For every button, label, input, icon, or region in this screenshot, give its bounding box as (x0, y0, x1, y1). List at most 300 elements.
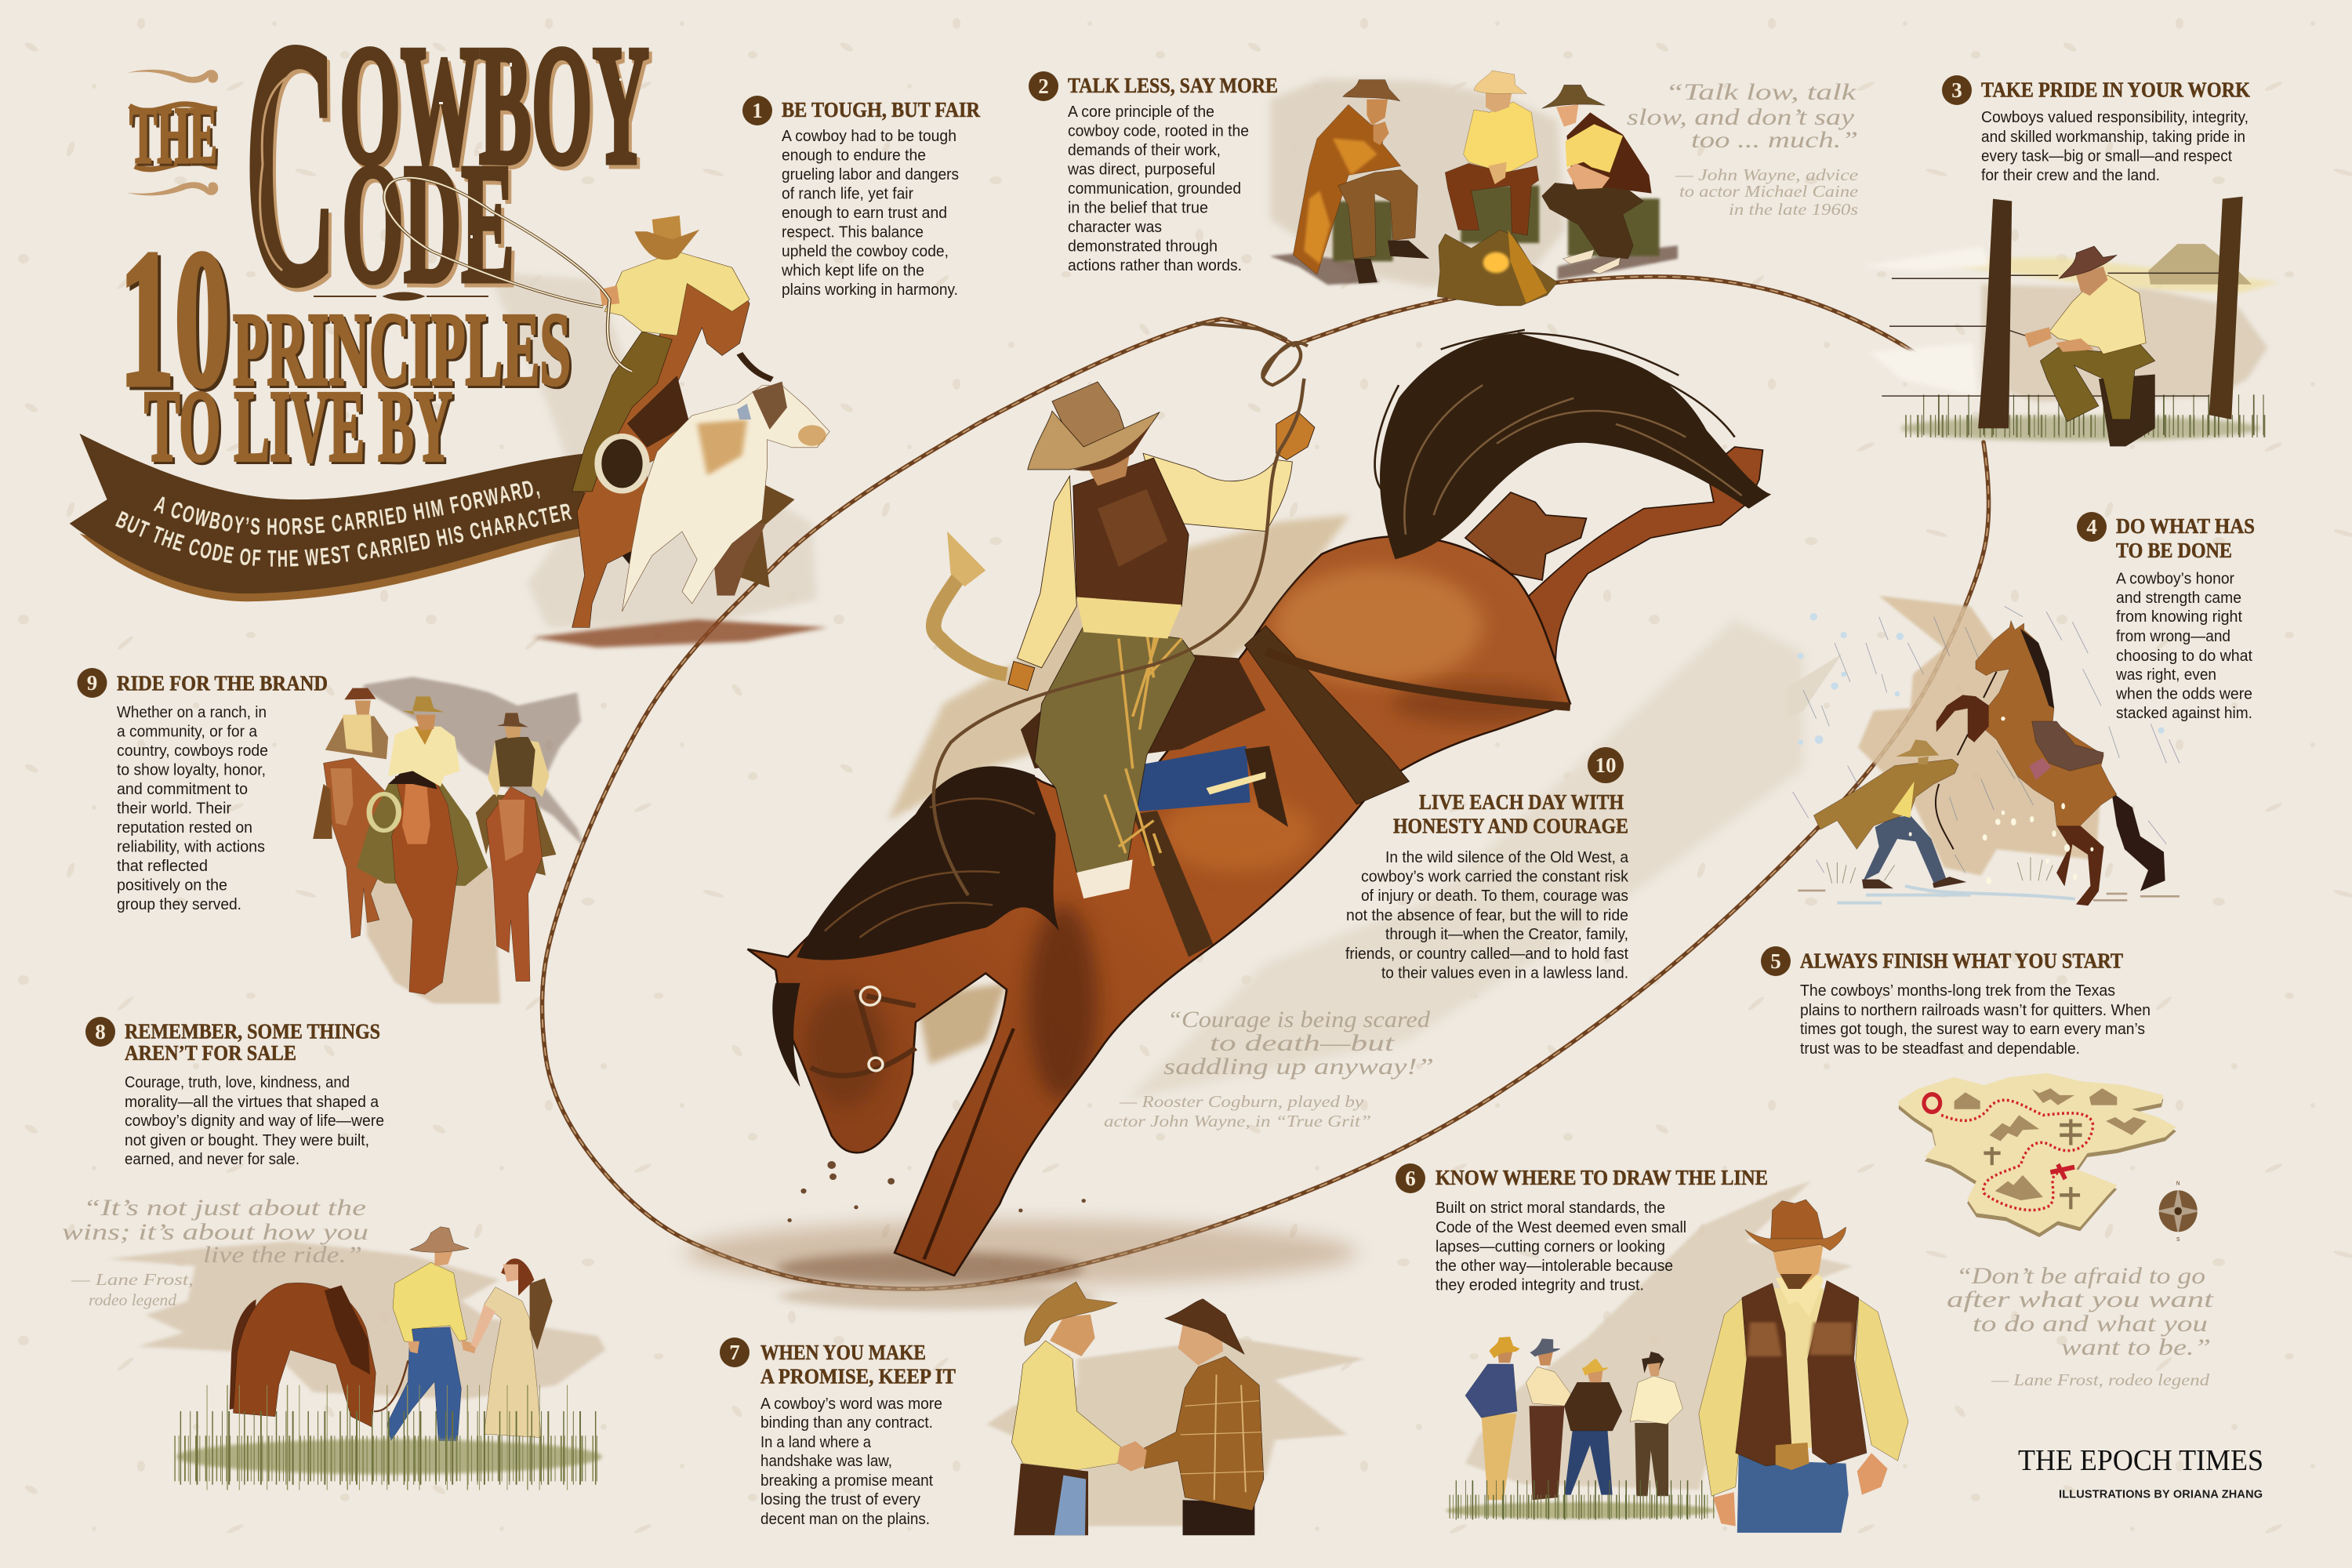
rain (1793, 606, 2180, 873)
man one (1465, 1337, 1519, 1500)
compass: N (2176, 1181, 2180, 1187)
title: to live by (144, 370, 455, 485)
body 1: which kept life on the (781, 262, 924, 279)
quote: Lane Frost dream (1947, 1263, 2214, 1389)
body 3: and skilled workmanship, taking pride in (1981, 129, 2245, 146)
heading 7: A PROMISE, KEEP IT (760, 1364, 956, 1388)
man 1 boots (1354, 241, 1429, 284)
hat (1771, 1200, 1824, 1240)
badge 4 (2077, 512, 2107, 542)
quote: Rooster Cogburn: saddling up anyway!” (1163, 1054, 1434, 1080)
body 9: reputation rested on (117, 819, 252, 837)
body 7 (760, 1396, 942, 1528)
badge 10 (1588, 747, 1624, 783)
quote: John Wayne (1627, 79, 1858, 219)
body 9: that reflected (117, 858, 208, 875)
grass (174, 1438, 602, 1474)
badge 6 (1396, 1163, 1425, 1193)
quote: Lane Frost dream: after what you want (1947, 1287, 2214, 1312)
kicking hind leg (1518, 447, 1762, 677)
whip tassel (947, 532, 985, 586)
principle 9 (77, 668, 328, 913)
title: principles: PRINCIPLES (233, 291, 571, 407)
illustration: campfire conversation (1270, 71, 1678, 306)
fence post left (1978, 199, 2012, 428)
grass (1446, 1500, 1715, 1519)
illustration: family and grazing horse (108, 1227, 606, 1474)
barn (2148, 244, 2252, 285)
horse (1936, 621, 2117, 906)
body 7: In a land where a (760, 1434, 872, 1451)
man shirt (2049, 275, 2146, 354)
badge 6: 6 (1405, 1167, 1416, 1190)
ear tag (737, 404, 751, 419)
quote: Lane Frost ride: rodeo legend (89, 1290, 176, 1309)
man head (434, 1248, 454, 1266)
heading 7 (760, 1341, 956, 1388)
body 5: plains to northern railroads wasn’t for quitters. When (1800, 1002, 2151, 1019)
body 10: to their values even in a lawless land. (1381, 964, 1628, 982)
shirt waist (1076, 597, 1181, 638)
face left (1050, 1315, 1095, 1356)
boots (1862, 877, 1966, 888)
horse shading (804, 567, 1559, 1259)
baby (530, 1278, 553, 1350)
body 10: friends, or country called—and to hold fast (1345, 946, 1628, 963)
body 1: respect. This balance (782, 224, 924, 241)
body 3: for their crew and the land. (1981, 167, 2160, 184)
body 2: A core principle of the (1068, 103, 1214, 121)
body 4: was right, even (2115, 666, 2216, 684)
face (2076, 267, 2107, 296)
grass (1900, 415, 2265, 441)
lead rope (1936, 672, 1997, 849)
heading 10: LIVE EACH DAY WITH (1419, 790, 1624, 814)
body 10: through it—when the Creator, family, (1385, 926, 1628, 943)
man two (1526, 1338, 1576, 1500)
title: cowboy code (245, 0, 652, 362)
badge 1 (742, 96, 772, 125)
heading 7: WHEN YOU MAKE (760, 1341, 926, 1364)
body 2: communication, grounded (1068, 180, 1241, 198)
body 9 (117, 704, 268, 913)
body 1: enough to earn trust and (782, 205, 947, 222)
title: 10 (119, 210, 233, 430)
compass: S (2176, 1237, 2180, 1243)
body 5 (1800, 982, 2151, 1058)
left rider (325, 688, 388, 759)
plaid lines (1181, 1374, 1264, 1500)
body 9: reliability, with actions (117, 839, 265, 856)
lead rope (374, 1353, 423, 1411)
map land (1899, 1073, 2176, 1233)
pants right (1183, 1500, 1254, 1535)
wash (1858, 596, 2101, 876)
heading 4 (2116, 514, 2255, 562)
ground shadow (1270, 245, 1678, 285)
principle 7 (720, 1338, 956, 1528)
quote: Lane Frost ride: — Lane Frost, (71, 1270, 194, 1289)
principle 5 (1761, 946, 2151, 1058)
illustration: bucking bronco and rider (684, 323, 1803, 1286)
man 1 coat (1293, 104, 1401, 274)
man 2 shirt (1464, 102, 1538, 174)
saddle and girth (1021, 626, 1570, 957)
pale wash (1788, 653, 1842, 719)
body 5: The cowboys’ months-long trek from the Texas (1800, 982, 2115, 1000)
body 5: trust was to be steadfast and dependable. (1800, 1040, 2080, 1058)
man 3 head (1556, 104, 1578, 127)
ornament rule (314, 293, 488, 299)
man 1 head and hand (1367, 100, 1389, 145)
badge 7 (720, 1338, 750, 1367)
body 2: character was (1068, 219, 1162, 236)
quote: John Wayne: slow, and don’t say (1627, 104, 1855, 130)
banner: tagline ribbon (69, 434, 795, 602)
man hat (410, 1227, 469, 1252)
vest right (1808, 1280, 1867, 1465)
heading 2: TALK LESS, SAY MORE (1068, 74, 1278, 97)
quote: Rooster Cogburn: — Rooster Cogburn, played by (1119, 1092, 1364, 1111)
body 6: they eroded integrity and trust. (1436, 1276, 1644, 1294)
left horse (324, 758, 388, 938)
body 4: stacked against him. (2116, 705, 2252, 722)
quote: Rooster Cogburn: actor John Wayne, in “True Grit” (1104, 1112, 1371, 1131)
x marker (2050, 1164, 2074, 1179)
body 2: was direct, purposeful (1067, 162, 1215, 179)
horse mane (325, 1285, 370, 1374)
collar (1776, 1276, 1824, 1317)
dark lower legs (1936, 695, 2103, 906)
badge 2 (1029, 71, 1058, 101)
heading 8: REMEMBER, SOME THINGS (125, 1019, 380, 1043)
body 10 (1345, 849, 1629, 982)
trail wash (364, 868, 500, 1004)
hands (1713, 1453, 1888, 1526)
shirt patch (1892, 782, 1915, 818)
shirt front (1773, 1288, 1825, 1448)
wash behind calf roping scene (487, 271, 817, 627)
map land edge (1899, 1077, 2176, 1237)
body 9: a community, or for a (117, 723, 258, 740)
quote: Rooster Cogburn: “Courage is being scared (1167, 1007, 1431, 1033)
title: cowboy code: ODE (345, 133, 517, 322)
face (1772, 1244, 1824, 1288)
signposts (1984, 1119, 2082, 1209)
face (1080, 437, 1133, 486)
right rider legs (476, 794, 556, 876)
man jeans (1864, 815, 1947, 884)
illustration: mending the fence (1860, 197, 2279, 446)
body 8: not given or bought. They were built, (125, 1132, 369, 1149)
body 1: enough to endure the (782, 147, 926, 165)
horse shadow (627, 376, 690, 448)
body 9: country, cowboys rode (117, 742, 268, 760)
body 4 (2115, 571, 2252, 722)
body 9: Whether on a ranch, in (117, 704, 267, 721)
center forelock (388, 768, 437, 789)
center rider (388, 696, 460, 786)
illustration: lineup of cowboys (1446, 1181, 1908, 1533)
horse tail (230, 1299, 256, 1410)
badge 3 (1942, 75, 1972, 105)
beard (1780, 1274, 1813, 1289)
publisher credit: THE EPOCH TIMES (2018, 1444, 2263, 1477)
body 6: the other way—intolerable because (1436, 1258, 1673, 1275)
body 1: of ranch life, yet fair (782, 185, 913, 202)
body 4: A cowboy’s honor (2116, 571, 2234, 588)
shirt right (1145, 1356, 1264, 1511)
man 1 hat (1343, 80, 1400, 101)
body 1: upheld the cowboy code, (782, 243, 949, 260)
heading 10 (1393, 790, 1628, 837)
body 1: A cowboy had to be tough (782, 128, 956, 145)
body 8 (125, 1074, 384, 1168)
body 7: breaking a promise meant (760, 1472, 933, 1490)
illustration: three riders (313, 677, 584, 1004)
body 3: every task—big or small—and respect (1981, 147, 2232, 165)
body 9: group they served. (117, 896, 241, 913)
illustration: rearing horse in storm (1788, 596, 2180, 906)
face right (1178, 1325, 1223, 1366)
tail (607, 499, 642, 568)
title: the (127, 70, 220, 195)
body 1 (781, 128, 959, 299)
woman arm (470, 1305, 495, 1348)
body 9: and commitment to (117, 781, 248, 798)
title: 10: 10 (119, 210, 230, 427)
far calf legs (712, 524, 766, 596)
man 3 shoes (1563, 249, 1621, 274)
arm raised (1143, 453, 1292, 532)
principle 2 (1029, 71, 1278, 274)
lasso from hand (934, 323, 1308, 895)
quote: John Wayne: in the late 1960s (1729, 200, 1858, 219)
man 2 hands (1488, 162, 1507, 184)
hat (1028, 382, 1160, 470)
hands (2024, 327, 2094, 352)
trail (1941, 1100, 2093, 1210)
sleeves (1699, 1299, 1747, 1496)
title: 10: 10 (122, 213, 233, 430)
heading 3: TAKE PRIDE IN YOUR WORK (1981, 78, 2250, 102)
fire logs (1437, 230, 1558, 306)
badge 9: 9 (87, 671, 97, 695)
man shirt (393, 1262, 467, 1343)
heading 4: DO WHAT HAS (2116, 514, 2255, 538)
badge 9 (77, 668, 107, 698)
quote: Rooster Cogburn (1104, 1007, 1434, 1131)
ice spatters (1798, 613, 2165, 745)
coat highlights (1304, 139, 1377, 264)
quote: Lane Frost dream: “Don’t be afraid to go (1956, 1263, 2205, 1289)
body 6: Code of the West deemed even small (1436, 1219, 1686, 1236)
buckle (1776, 1443, 1809, 1470)
title: to live by: TO LIVE BY (144, 370, 452, 483)
principle 4 (2077, 512, 2255, 722)
woman dress (484, 1287, 541, 1438)
herd silhouette (364, 677, 584, 847)
horizon wash (1910, 257, 2279, 293)
hands (408, 1340, 477, 1353)
handshake (1117, 1441, 1147, 1472)
hat right (1165, 1299, 1244, 1354)
shirt (604, 252, 750, 336)
right horse face (499, 800, 524, 861)
hat and face (1896, 739, 1939, 764)
heading 4: TO BE DONE (2116, 539, 2232, 562)
body 10: of injury or death. To them, courage was (1361, 887, 1628, 905)
man 3 shirt (1566, 124, 1623, 172)
coat (1813, 759, 1958, 849)
man three (1564, 1359, 1622, 1495)
body 2: cowboy code, rooted in the (1068, 122, 1249, 140)
whip braid (934, 574, 1007, 674)
lariat loop (384, 178, 632, 372)
center horse blaze (402, 784, 430, 844)
illustration: rider roping a calf (384, 178, 829, 648)
far hind leg (1465, 492, 1586, 580)
snowfall (1909, 717, 2093, 884)
body 9: their world. Their (117, 800, 231, 817)
principle 6 (1396, 1163, 1768, 1294)
body 10: In the wild silence of the Old West, a (1385, 849, 1629, 866)
publisher credit (2018, 1444, 2263, 1501)
hat left (1025, 1282, 1117, 1346)
coiled rope (369, 794, 399, 830)
man 2 hat (1474, 71, 1526, 93)
body 7: losing the trust of every (760, 1491, 920, 1508)
badge 7: 7 (729, 1341, 740, 1364)
badge 1: 1 (752, 99, 763, 122)
badge 8 (85, 1017, 115, 1047)
man trousers (2040, 339, 2155, 422)
body 8: earned, and never for sale. (125, 1151, 299, 1168)
body 4: when the odds were (2115, 685, 2252, 702)
man 2 pants (1445, 163, 1539, 235)
body 7: A cowboy’s word was more (760, 1396, 942, 1413)
center horse (392, 776, 458, 994)
body 7: handshake was law, (760, 1453, 892, 1470)
wires (1882, 273, 2220, 396)
big cowboy (1699, 1200, 1908, 1533)
fringe (1105, 586, 1181, 866)
left rider leg (313, 784, 332, 839)
body 1: grueling labor and dangers (782, 166, 959, 183)
bridle (811, 987, 916, 1076)
shirt left (1011, 1341, 1122, 1470)
stump (2099, 375, 2155, 446)
heading 10: HONESTY AND COURAGE (1393, 814, 1628, 837)
principle 10 (1345, 747, 1629, 982)
hat (634, 216, 699, 260)
body 3 (1981, 109, 2249, 184)
illustration: handshake (780, 1282, 1365, 1535)
body 2 (1067, 103, 1249, 274)
hay bales (1333, 186, 1660, 261)
principle 8 (85, 1017, 384, 1168)
saddle (2032, 721, 2103, 771)
quote: Lane Frost ride: live the ride.” (203, 1242, 362, 1268)
title: to live by: TO LIVE BY (147, 372, 455, 485)
principle 1 (742, 96, 980, 299)
hand (600, 285, 619, 306)
jeans leg and boot (1119, 746, 1288, 827)
quote: Lane Frost dream: — Lane Frost, rodeo legend (1991, 1370, 2210, 1389)
fire glow (1483, 230, 1547, 303)
cuff (1076, 859, 1133, 898)
body 3: Cowboys valued responsibility, integrity, (1981, 109, 2249, 126)
body 6 (1436, 1200, 1686, 1294)
vest (1073, 458, 1189, 606)
center rider legs (357, 782, 488, 886)
heading 8: AREN’T FOR SALE (125, 1041, 296, 1065)
infographic: the cowboy code: OWBOY (343, 15, 652, 204)
wash (987, 1338, 1365, 1526)
man 2 head (1486, 93, 1512, 112)
vest highlights (1747, 1323, 1853, 1356)
man 1 pants (1338, 170, 1417, 259)
quote: Lane Frost ride (62, 1195, 368, 1309)
mud above (780, 1283, 1095, 1309)
tagline text: A COWBOY’S HORSE CARRIED HIM FORWARD, (154, 481, 539, 535)
quote: Lane Frost ride: wins; it’s about how you (62, 1219, 368, 1245)
body 5: times got tough, the surest way to earn every man’s (1800, 1021, 2145, 1038)
field wash (1982, 285, 2267, 401)
title: principles: PRINCIPLES (235, 293, 573, 409)
publisher credit: ILLUSTRATIONS BY ORIANA ZHANG (2059, 1488, 2263, 1501)
body 4: and strength came (2116, 590, 2241, 607)
mane (2020, 629, 2054, 708)
wash (1270, 78, 1566, 288)
calf head rope (752, 382, 787, 430)
tail (1375, 330, 1771, 559)
fence post right (2209, 197, 2243, 419)
body 6: lapses—cutting corners or looking (1436, 1239, 1665, 1256)
man 3 pants (1542, 183, 1644, 259)
body 2: in the belief that true (1068, 199, 1208, 216)
badge 3: 3 (1951, 78, 1962, 102)
saddle bag (2029, 758, 2052, 780)
man 3 hat (1542, 85, 1605, 108)
start marker (1924, 1094, 1940, 1112)
grass tufts (1827, 857, 2053, 884)
body 8: cowboy’s dignity and way of life—were (125, 1112, 384, 1130)
rider (1008, 382, 1570, 957)
body 4: from wrong—and (2116, 628, 2230, 645)
title lockup (119, 0, 652, 485)
mud ground (532, 619, 827, 648)
quote: John Wayne: too ... much.” (1691, 127, 1858, 153)
body 9: positively on the (117, 877, 227, 894)
badge 10: 10 (1595, 753, 1617, 777)
body 10: not the absence of fear, but the will to ride (1346, 907, 1628, 924)
heading 9: RIDE FOR THE BRAND (117, 671, 328, 695)
man jeans (387, 1327, 461, 1441)
quote: Lane Frost dream: want to be.” (2061, 1334, 2211, 1360)
woman face (503, 1265, 518, 1282)
principle 3 (1942, 75, 2250, 184)
body 4: from knowing right (2116, 608, 2242, 626)
chaps (1035, 626, 1196, 873)
body 7: binding than any contract. (760, 1414, 933, 1432)
body 6: Built on strict moral standards, the (1436, 1200, 1665, 1217)
body 4: choosing to do what (2116, 648, 2252, 665)
wash (108, 1242, 606, 1399)
quote: John Wayne: “Talk low, talk (1665, 79, 1857, 105)
title: principles (233, 291, 573, 409)
body 7: decent man on the plains. (760, 1511, 930, 1528)
